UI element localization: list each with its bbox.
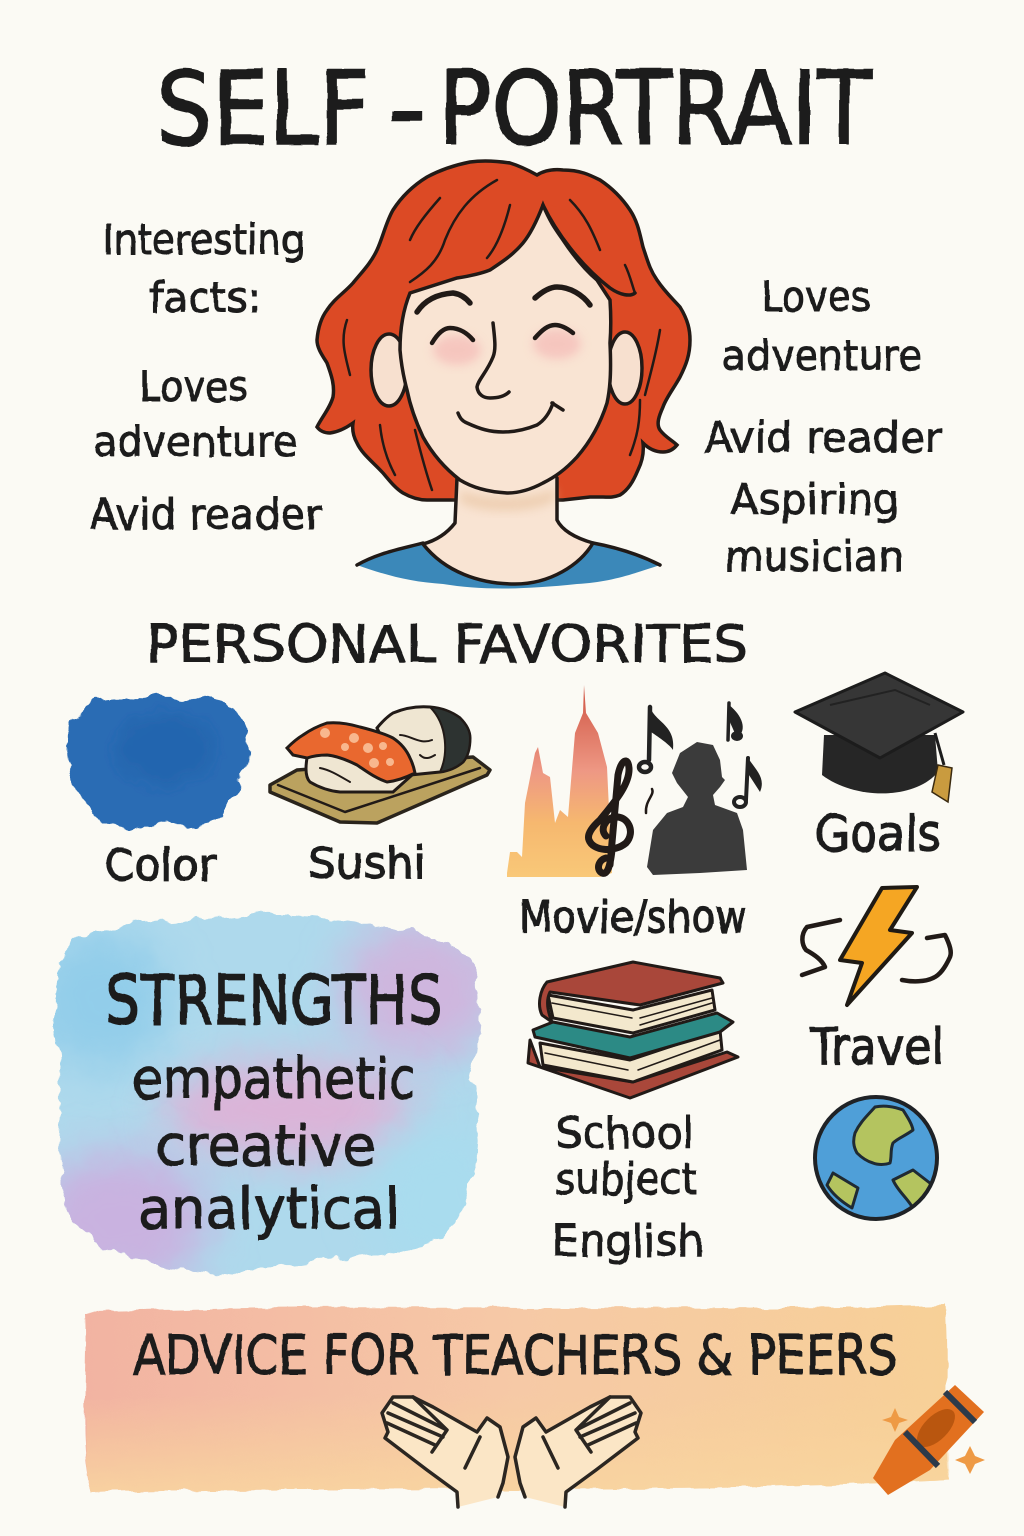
heading: personal favorites: PERSONAL FAVORITES: [146, 615, 748, 675]
icon: crayon with sparkles: [873, 1385, 985, 1495]
panel: strengths: analytical: [138, 1177, 400, 1242]
left text: interesting facts: facts:: [149, 273, 261, 322]
shirt: [357, 543, 660, 588]
icon: open hands: [382, 1397, 641, 1507]
hair: [317, 161, 690, 500]
panel: advice: ADVICE FOR TEACHERS & PEERS: [133, 1324, 897, 1387]
right text: traits: [704, 272, 943, 581]
icon: stack of books: [528, 962, 738, 1098]
icon: globe: [815, 1097, 937, 1219]
face: [400, 205, 611, 493]
panel: strengths: empathetic: [132, 1047, 416, 1112]
hair strands: [344, 180, 660, 490]
icon: blue paint blob (color): [67, 695, 250, 828]
title: PORTRAIT: [438, 50, 873, 169]
panel: strengths: creative: [156, 1114, 376, 1179]
label: movie/show: Movie/show: [519, 892, 747, 943]
right text: traits: musician: [724, 532, 904, 581]
label: school subject english: subject: [555, 1154, 697, 1205]
left text: interesting facts: adventure: [93, 417, 297, 466]
advice background: [84, 1305, 948, 1492]
left text: interesting facts: Loves: [139, 362, 248, 411]
title: -: [388, 50, 426, 169]
label: travel: Travel: [809, 1018, 944, 1076]
watercolor wash: [52, 910, 482, 1276]
label: color: Color: [104, 840, 217, 891]
right text: traits: Avid reader: [704, 413, 943, 462]
panel: strengths: STRENGTHS: [105, 962, 443, 1041]
ears: [371, 332, 642, 406]
right text: traits: adventure: [722, 331, 922, 380]
blush: [433, 335, 481, 365]
icon: sushi: [270, 707, 490, 823]
right text: traits: Loves: [761, 272, 871, 321]
left text: interesting facts: Interesting: [103, 215, 305, 264]
label: school subject english: [552, 1108, 704, 1267]
title: SELF: [156, 50, 370, 169]
neck and shoulders: [423, 478, 593, 584]
label: sushi: Sushi: [308, 838, 426, 889]
label: goals: Goals: [815, 805, 941, 863]
right text: traits: Aspiring: [730, 475, 900, 524]
left text: interesting facts: Avid reader: [90, 490, 323, 539]
panel: advice: [84, 1305, 948, 1507]
label: school subject english: English: [552, 1216, 704, 1267]
icon: graduation cap: [795, 673, 963, 802]
left text: interesting facts: [90, 215, 323, 539]
brows, eyes, nose, mouth: [417, 287, 590, 432]
icon: movie castle, treble clef and singer: [507, 685, 762, 877]
panel: strengths: [52, 910, 482, 1276]
right hair lock: [543, 205, 635, 295]
label: school subject english: School: [556, 1108, 694, 1159]
portrait: [317, 161, 690, 588]
icon: lightning with swirls: [802, 887, 951, 1005]
